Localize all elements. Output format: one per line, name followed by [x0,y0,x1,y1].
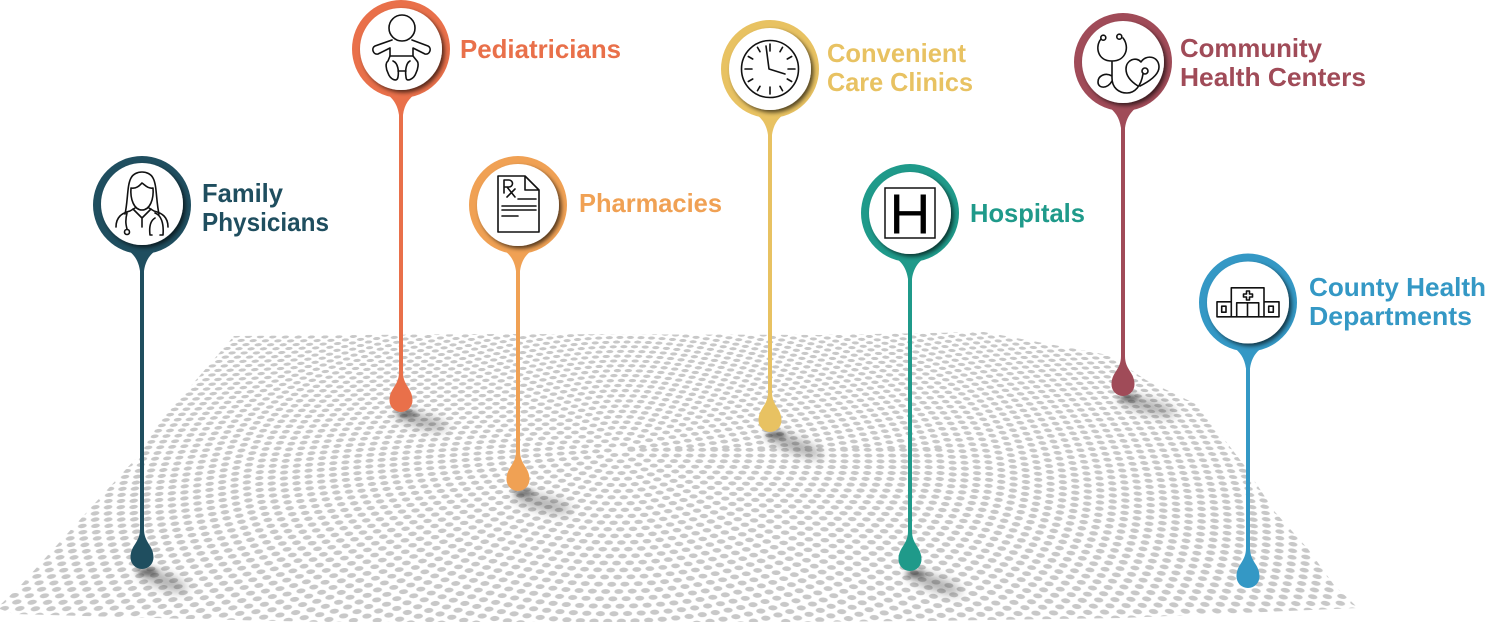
pin body [1199,254,1297,588]
label: Community Health Centers: Community [1180,33,1323,63]
label: Hospitals: Hospitals [970,198,1085,228]
label: Family Physicians: Physicians [202,207,329,237]
ground shadow [393,408,449,434]
icon: physician [116,172,168,235]
pin body [469,156,567,491]
icon: clinic building [1217,288,1279,317]
label: Convenient Care Clinics: Care Clinics [827,67,973,97]
pin body [1074,13,1172,396]
label: County Health Departments: Departments [1309,301,1472,331]
pin body [352,0,450,412]
pin: Hospitals [861,164,1085,599]
icon: hospital sign: H [889,182,931,246]
label: Community Health Centers [1180,33,1366,92]
label: Family Physicians [202,178,329,237]
label: Pediatricians: Pediatricians [460,34,621,64]
pin: Community Health Centers [1074,13,1366,420]
icon: baby [373,15,430,80]
pin: Pediatricians [352,0,621,434]
ground shadow [1117,392,1177,420]
label: County Health Departments [1309,272,1486,331]
label: County Health Departments: County Health [1309,272,1486,302]
pin: Convenient Care Clinics [721,20,973,462]
icon: stethoscope and heart [1098,34,1159,93]
label: Pharmacies: Pharmacies [579,188,722,218]
ground shadow [511,488,573,518]
label: Convenient Care Clinics: Convenient [827,38,966,68]
label: Community Health Centers: Health Centers [1180,62,1366,92]
pin: County Health Departments [1199,254,1486,588]
pin: Pharmacies [469,156,722,518]
pin body [861,164,959,571]
label: Family Physicians: Family [202,178,284,208]
icon: clock [742,40,798,98]
ground shadow [905,567,963,599]
pin body [93,156,191,569]
icon: prescription [498,176,539,232]
pin: Family Physicians [93,156,329,597]
dotted perspective ground field [0,332,1356,622]
ground shadow [134,563,190,597]
ground shadow [764,428,824,462]
pin body [721,20,819,432]
label: Convenient Care Clinics [827,38,973,97]
